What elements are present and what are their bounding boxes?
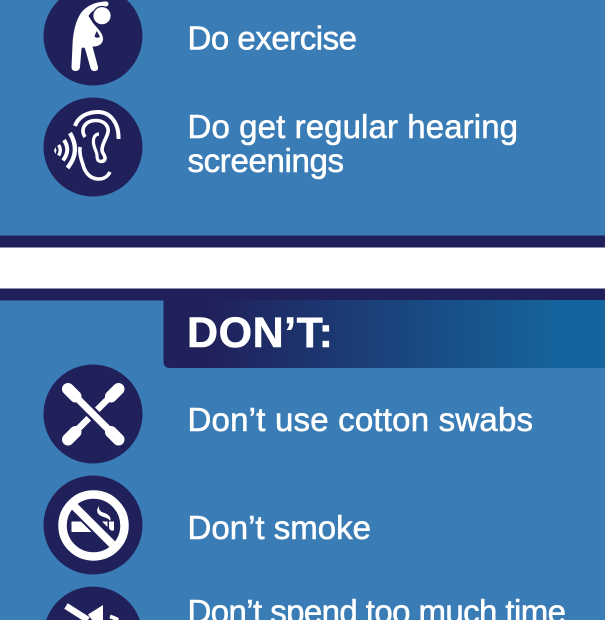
label: Do exercise: Do exercise	[188, 20, 357, 56]
icon: crossed cotton swabs	[44, 364, 142, 464]
heading: DON'T: DON’T:	[187, 309, 333, 357]
label: smoke: Don’t smoke	[188, 509, 371, 546]
icon: ear with sound waves	[44, 98, 142, 196]
heading: DON'T	[164, 300, 605, 368]
white divider band	[0, 236, 605, 300]
label: regular hearing screenings: screenings	[188, 142, 344, 179]
label: regular hearing screenings: Do get regular hearing	[188, 108, 518, 145]
icon: person exercising	[44, 0, 143, 85]
label: cotton swabs: Don’t use cotton swabs	[188, 401, 533, 438]
icon: muted speaker	[46, 587, 140, 620]
icon: no smoking	[44, 476, 142, 574]
